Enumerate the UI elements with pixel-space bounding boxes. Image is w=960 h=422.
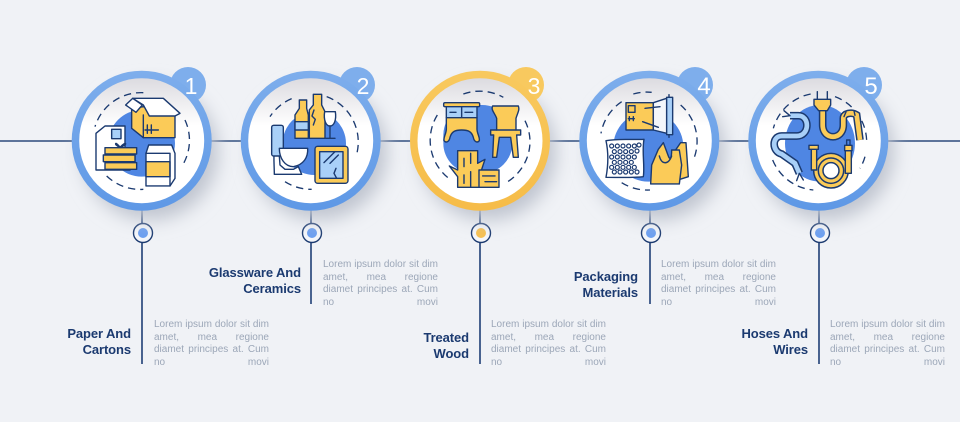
text block: step 2 description	[323, 259, 438, 308]
heading: Packaging Materials: Packaging	[574, 269, 638, 284]
text block: step 1 description: no movi	[154, 357, 269, 368]
text block: step 3 description: Lorem ipsum dolor sit dim	[491, 319, 606, 330]
text block: step 4 description: amet, mea regione	[661, 272, 776, 283]
heading: Treated Wood	[423, 330, 469, 361]
text block: step 5 description: Lorem ipsum dolor sit dim	[830, 319, 945, 330]
panel: step 5 circle	[748, 67, 894, 220]
icon: packaging materials	[601, 92, 697, 190]
text block: step 3 description: amet, mea regione	[491, 332, 606, 343]
heading: Hoses And Wires: Wires	[773, 342, 808, 357]
text block: step 4 description	[661, 259, 776, 308]
heading: Hoses And Wires	[741, 326, 808, 357]
text block: step 4 description: no movi	[661, 297, 776, 308]
icon: paper and cartons	[95, 93, 189, 189]
heading: Treated Wood: Treated	[423, 330, 469, 345]
text block: step 1 description	[154, 319, 269, 368]
number badge 1: 1	[185, 73, 197, 99]
number badge 5: 5	[864, 73, 878, 100]
number badge 4: 4	[697, 73, 711, 100]
heading: Packaging Materials	[574, 269, 638, 300]
text block: step 4 description: diamet principes at. Cum	[661, 284, 776, 295]
heading: Paper And Cartons: Paper And	[67, 326, 131, 341]
text block: step 5 description: amet, mea regione	[830, 332, 945, 343]
heading: Treated Wood: Wood	[434, 346, 469, 361]
step 2 connector and marker	[302, 205, 322, 304]
icon: hoses and wires	[773, 92, 867, 190]
step 3 connector and marker	[472, 205, 490, 364]
text block: step 1 description: amet, mea regione	[154, 332, 269, 343]
text block: step 3 description: no movi	[491, 357, 606, 368]
heading: Hoses And Wires: Hoses And	[741, 326, 808, 341]
panel: step 1 circle	[72, 67, 218, 220]
text block: step 2 description: diamet principes at. Cum	[323, 284, 438, 295]
text block: step 2 description: amet, mea regione	[323, 272, 438, 283]
number badge 3: 3	[528, 73, 540, 99]
step 5 connector and marker	[810, 205, 830, 364]
icon: treated wood	[430, 91, 530, 187]
text block: step 5 description: diamet principes at. Cum	[830, 344, 945, 355]
panel: step 3 circle	[410, 67, 556, 220]
heading: Packaging Materials: Materials	[583, 285, 638, 300]
text block: step 2 description: no movi	[323, 297, 438, 308]
heading: Glassware And Ceramics	[209, 265, 301, 296]
step 4 connector and marker	[642, 205, 660, 304]
text block: step 1 description: Lorem ipsum dolor sit dim	[154, 319, 269, 330]
heading: Glassware And Ceramics: Glassware And	[209, 265, 301, 280]
heading: Glassware And Ceramics: Ceramics	[243, 281, 301, 296]
number badge 2: 2	[357, 73, 369, 99]
text block: step 4 description: Lorem ipsum dolor sit dim	[661, 259, 776, 270]
heading: Paper And Cartons	[67, 326, 131, 357]
panel: step 2 circle	[241, 67, 387, 220]
text block: step 5 description	[830, 319, 945, 368]
text block: step 3 description	[491, 319, 606, 368]
icon: glassware and ceramics	[270, 94, 358, 189]
text block: step 1 description: diamet principes at. Cum	[154, 344, 269, 355]
step 1 connector and marker	[134, 205, 152, 364]
text block: step 2 description: Lorem ipsum dolor sit dim	[323, 259, 438, 270]
heading: Paper And Cartons: Cartons	[83, 342, 131, 357]
panel: step 4 circle	[579, 67, 725, 220]
text block: step 5 description: no movi	[830, 357, 945, 368]
text block: step 3 description: diamet principes at. Cum	[491, 344, 606, 355]
